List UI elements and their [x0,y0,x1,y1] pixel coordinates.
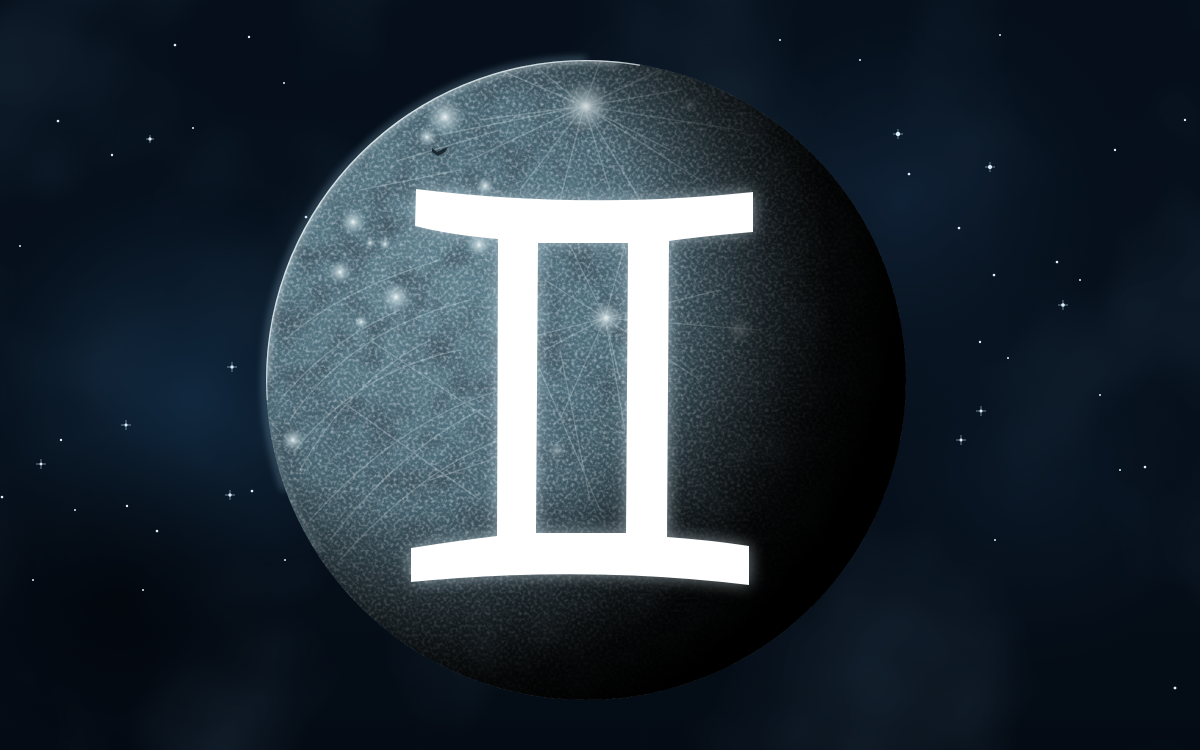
planet: Mercury [260,55,910,705]
star glints [36,129,1068,500]
symbol shape [411,189,753,585]
lit limb [266,60,620,380]
bright craters [281,80,754,459]
icon: Gemini zodiac symbol [411,189,753,585]
planet surface texture [260,55,910,705]
symbol glow [411,189,753,585]
dark scarp marks [432,147,448,156]
ray streaks [280,62,760,560]
terminator shadow [266,60,906,700]
planet rim glow [265,60,586,490]
